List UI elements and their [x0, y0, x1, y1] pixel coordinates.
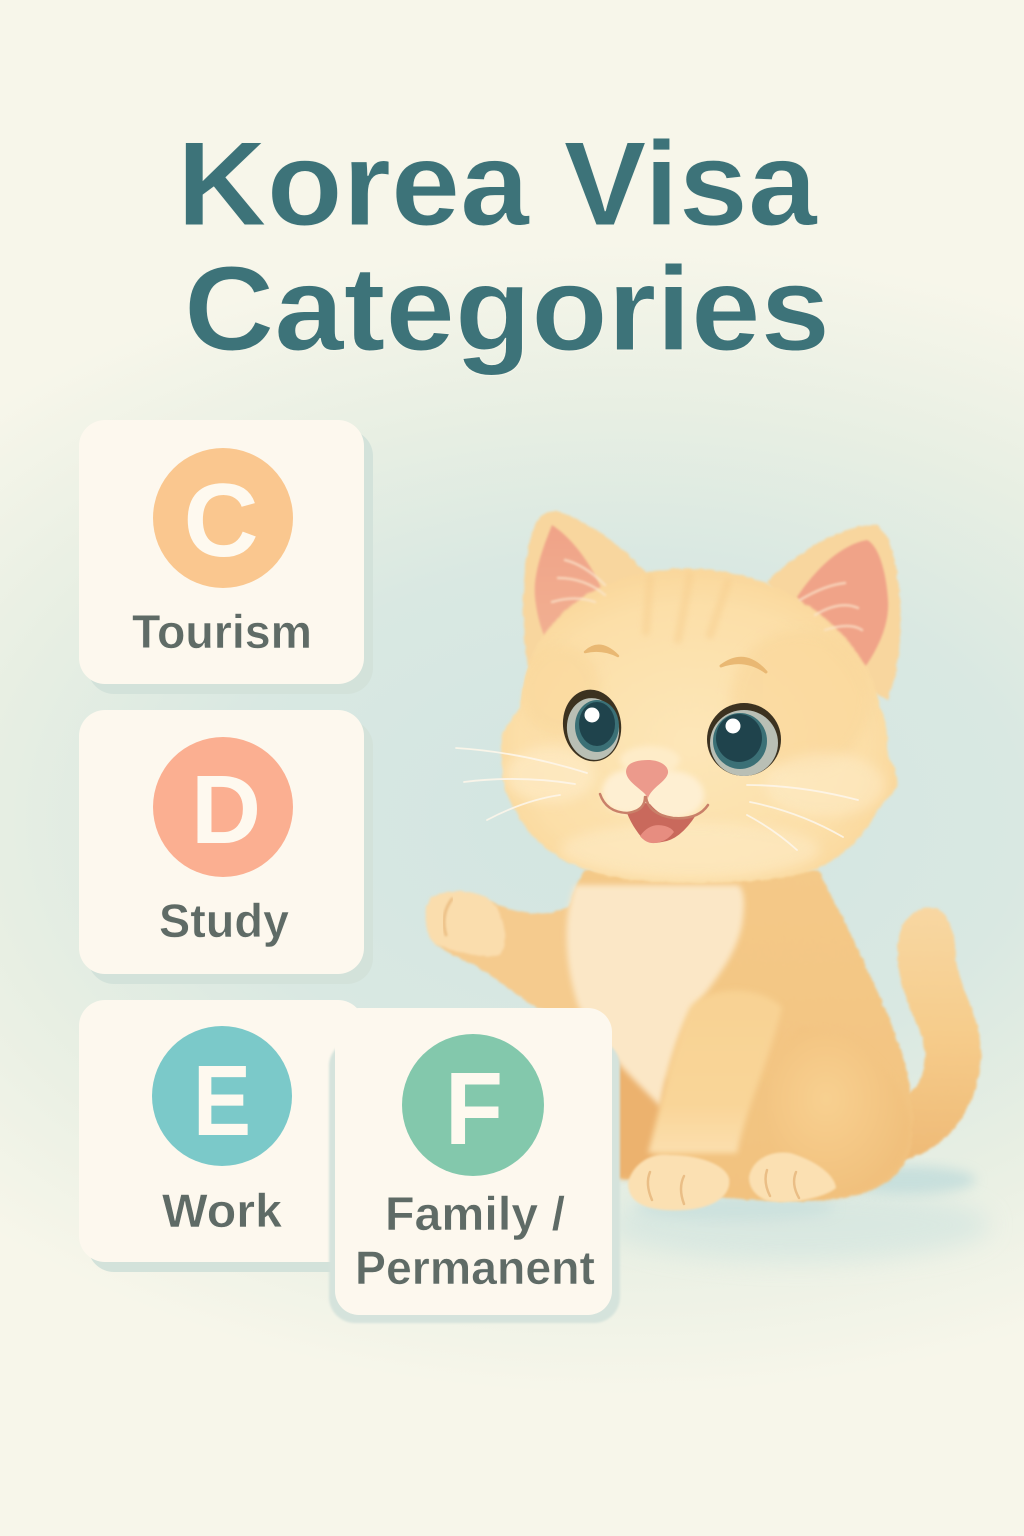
cat muzzle: [602, 746, 704, 819]
cat body: [563, 870, 913, 1201]
title: Categories: [184, 242, 830, 376]
icon: F badge: [402, 1034, 544, 1176]
label: Family / Permanent: Family /: [385, 1187, 565, 1240]
icon: D badge: [153, 737, 293, 877]
cat front paw: [628, 1155, 729, 1210]
cat right eye: [707, 703, 781, 776]
title: Korea Visa: [177, 117, 818, 251]
label: Study: Study: [159, 894, 289, 947]
label: Tourism: Tourism: [132, 605, 312, 658]
cat paw toe line: [444, 899, 452, 935]
card: Family / Permanent: [329, 1008, 620, 1323]
icon: D badge: D: [191, 755, 261, 864]
cat lower body shading: [612, 1050, 670, 1180]
cat face shading: [505, 630, 885, 878]
cat forehead stripes: [646, 575, 728, 640]
label: Family / Permanent: [355, 1187, 595, 1294]
title: [177, 117, 830, 376]
cat back paw: [749, 1152, 836, 1202]
card: Tourism: [79, 420, 373, 694]
cat nose: [626, 760, 668, 798]
cat raised paw: [425, 891, 590, 1030]
icon: C badge: C: [183, 463, 259, 579]
cat chest fluff: [567, 885, 744, 1107]
cat mouth: [627, 803, 696, 843]
icon: C badge: [153, 448, 293, 588]
cat right ear inner: [797, 540, 888, 683]
cat toes: [648, 1170, 799, 1204]
cat left eye: [558, 686, 626, 765]
cat whiskers: [456, 748, 858, 850]
cat haunch: [765, 1027, 910, 1198]
icon: F badge: F: [445, 1051, 503, 1166]
card: Work: [79, 1000, 373, 1272]
cat left ear inner: [535, 525, 605, 643]
label: Family / Permanent: Permanent: [355, 1241, 595, 1294]
label: Work: Work: [162, 1184, 283, 1237]
cat ear fur: [552, 560, 862, 630]
card: Study: [79, 710, 373, 984]
cat front leg: [648, 990, 782, 1153]
cat ears: [523, 511, 901, 700]
cat illustration: [425, 511, 990, 1261]
cat smile line: [600, 794, 708, 818]
cat eyebrows: [585, 646, 618, 656]
ground shadow: [610, 1166, 990, 1261]
icon: E badge: [152, 1026, 292, 1166]
cat tail: [897, 908, 981, 1160]
icon: E badge: E: [193, 1045, 251, 1157]
cat head: [502, 569, 898, 883]
